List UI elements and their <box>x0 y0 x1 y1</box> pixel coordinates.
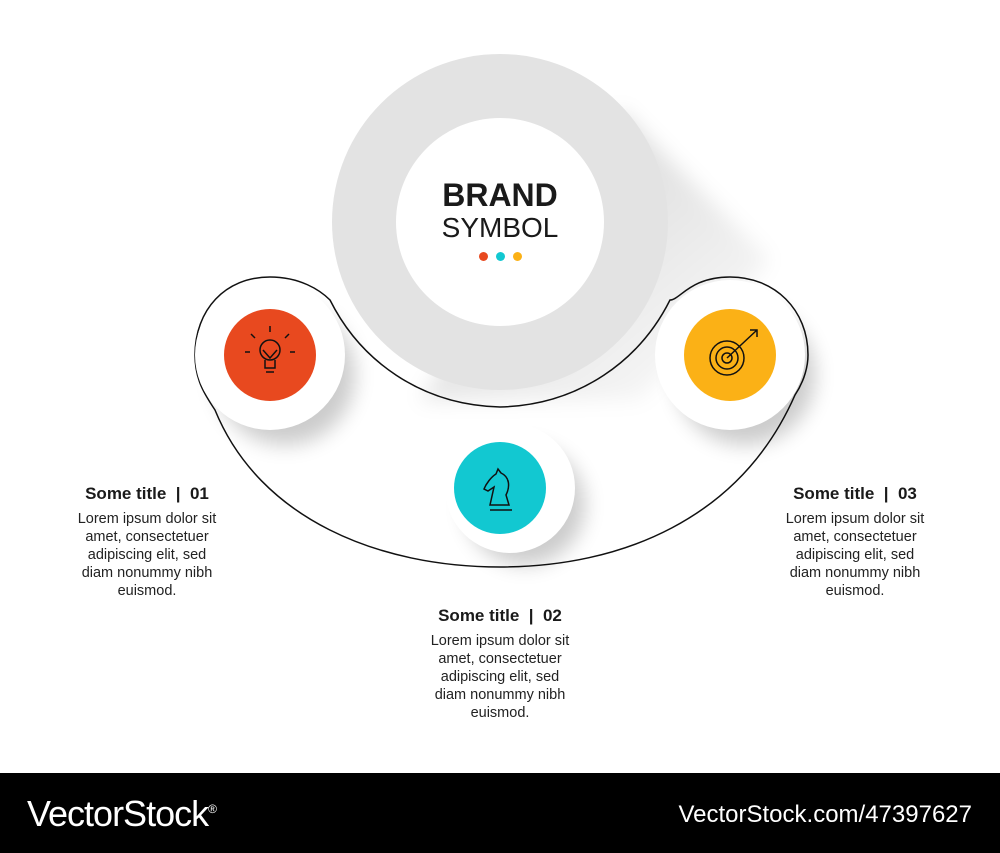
text block 01: Some title | 01 <box>85 484 209 503</box>
text block 01: diam nonummy nibh <box>82 565 212 581</box>
text block 01: euismod. <box>118 583 176 599</box>
text block 02: Lorem ipsum dolor sit <box>431 633 569 649</box>
text block 01: Lorem ipsum dolor sit <box>78 511 216 527</box>
text block 02: Some title | 02 <box>438 606 562 625</box>
text block 03: Lorem ipsum dolor sit <box>786 511 924 527</box>
big circle <box>332 54 668 390</box>
brand title: BRAND <box>442 177 558 213</box>
text block 01: adipiscing elit, sed <box>88 547 206 563</box>
footer bar: VectorStock® <box>27 793 216 834</box>
step 1 circle <box>195 280 355 445</box>
brand title: SYMBOL <box>442 212 558 243</box>
big circle shadow <box>420 110 770 400</box>
icon: light bulb <box>245 326 295 372</box>
text block 02: diam nonummy nibh <box>435 687 565 703</box>
text block 02: adipiscing elit, sed <box>441 669 559 685</box>
footer bar: VectorStock.com/47397627 <box>678 801 972 828</box>
text block 01: amet, consectetuer <box>85 529 209 545</box>
text block 03: euismod. <box>826 583 884 599</box>
text block 03: adipiscing elit, sed <box>796 547 914 563</box>
text block 03 <box>786 484 924 599</box>
brand title <box>442 177 558 261</box>
text block 01 <box>78 484 216 599</box>
text block 03: amet, consectetuer <box>793 529 917 545</box>
icon: chess knight <box>484 469 512 510</box>
text block 02: euismod. <box>471 705 529 721</box>
text block 03: Some title | 03 <box>793 484 917 503</box>
text block 03: diam nonummy nibh <box>790 565 920 581</box>
step 2 circle <box>445 423 585 565</box>
text block 02 <box>431 606 570 721</box>
step 3 circle <box>655 280 815 445</box>
connecting outline <box>195 277 808 567</box>
footer bar <box>0 773 1000 853</box>
text block 02: amet, consectetuer <box>438 651 562 667</box>
icon: target <box>710 330 757 375</box>
